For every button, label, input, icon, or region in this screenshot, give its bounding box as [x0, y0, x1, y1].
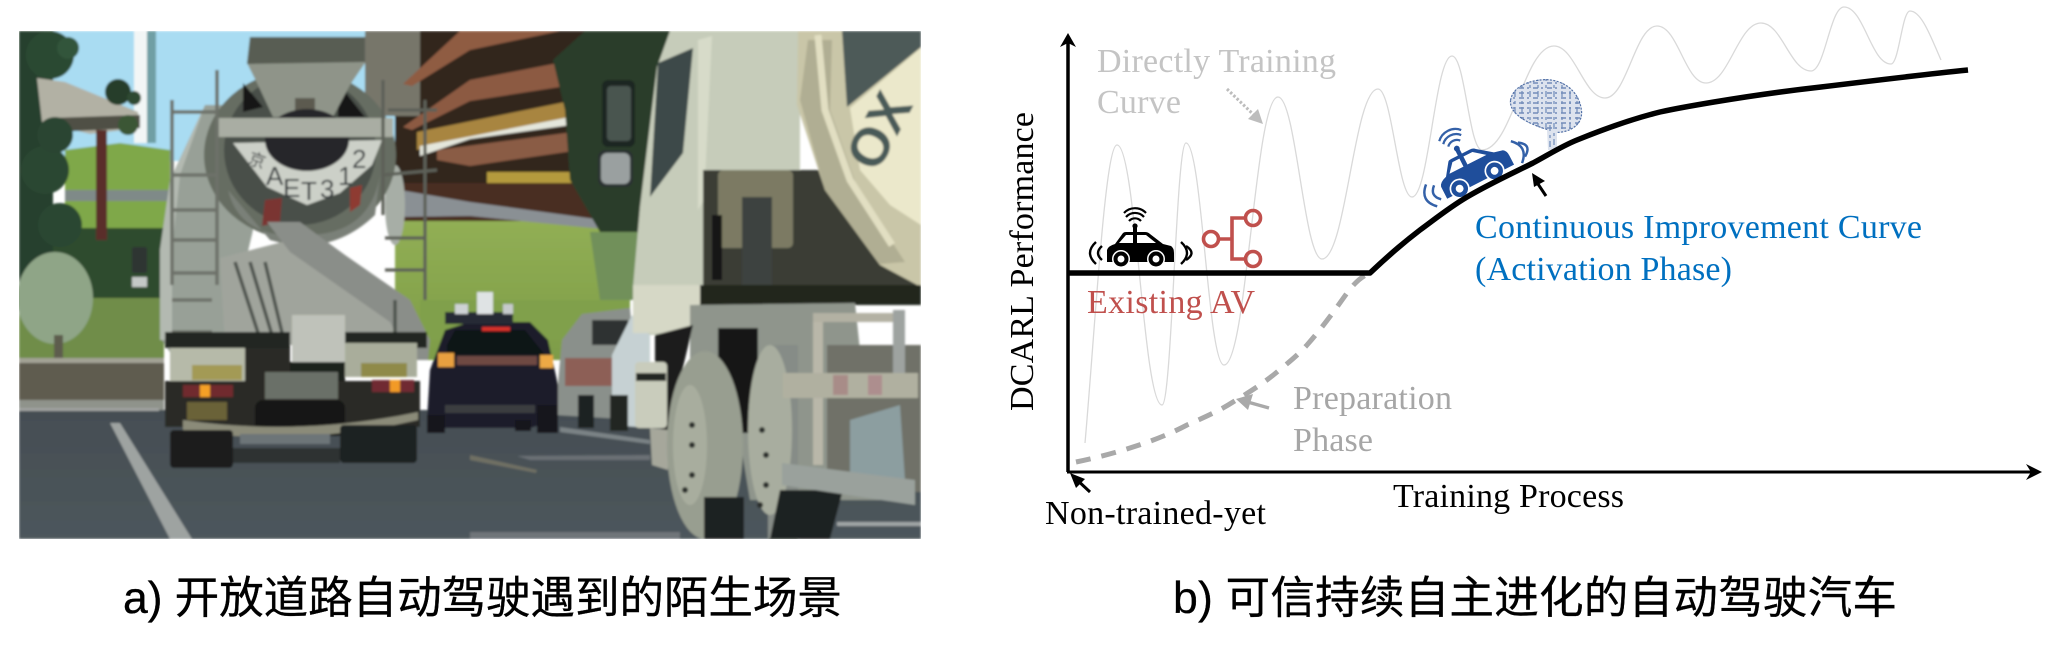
- directly training curve: [1085, 7, 1941, 443]
- chart b: DCARL performance vs training process: [1004, 7, 2042, 532]
- roadside tree and pagoda: [19, 31, 141, 281]
- x axis: [1067, 464, 2042, 480]
- truck plate lettering: 3: [320, 174, 334, 204]
- arrow: to continuous improvement curve: [1532, 173, 1546, 196]
- side mirrors: [598, 80, 635, 187]
- label: directly training curve: [1097, 43, 1336, 121]
- roadside tree behind right truck: [553, 31, 680, 300]
- truck plate lettering: 2: [352, 144, 366, 174]
- icon: red branching tree: [1204, 210, 1260, 266]
- stone wall and curb: [19, 358, 164, 410]
- background grass and hill: [19, 143, 630, 360]
- truck plate lettering: E: [283, 173, 300, 203]
- label: continuous improvement curve: Continuous Improvement Curve: [1475, 209, 1922, 246]
- icon: autonomous car (existing AV): [1090, 208, 1192, 268]
- right concrete mixer truck: [598, 31, 924, 335]
- label: continuous improvement curve: (Activation Phase): [1475, 251, 1732, 288]
- truck plate lettering: 京: [246, 149, 268, 173]
- icon: circuit brain: [1510, 79, 1582, 150]
- label: x axis title: Training Process: [1393, 478, 1624, 515]
- test vehicle: dark SUV with roof sensors: [427, 292, 558, 433]
- preparation phase dashed curve: [1076, 273, 1370, 462]
- arrow: to origin: [1070, 473, 1090, 492]
- right truck chassis, wheels and rack: [633, 285, 921, 540]
- label: y axis title: DCARL Performance: [1004, 112, 1041, 411]
- center concrete mixer truck: [132, 37, 437, 468]
- caption a: a) 开放道路自动驾驶遇到的陌生场景: [123, 574, 842, 623]
- label: directly training curve: Curve: [1097, 84, 1181, 121]
- label: non-trained-yet: Non-trained-yet: [1045, 495, 1267, 532]
- label: preparation phase: Preparation: [1293, 380, 1452, 417]
- olive tree: [19, 250, 95, 359]
- building with rust roofs: [365, 31, 608, 229]
- arrow: to preparation phase: [1236, 394, 1269, 410]
- label: preparation phase: [1293, 380, 1452, 459]
- photo: open road scene with concrete mixer trucks: [17, 31, 924, 540]
- arrow: to directly training curve: [1227, 89, 1263, 124]
- road surface and lane markings: [19, 408, 921, 539]
- label: existing AV: Existing AV: [1087, 284, 1255, 321]
- mixer drum lettering: OX: [835, 83, 924, 180]
- caption b: b) 可信持续自主进化的自动驾驶汽车: [1173, 574, 1897, 623]
- sky and pole: [52, 31, 398, 162]
- truck plate lettering: [247, 148, 366, 201]
- existing AV flat line and continuous improvement curve: [1068, 70, 1968, 273]
- truck plate lettering: A: [266, 161, 284, 191]
- truck plate lettering: 1: [338, 161, 352, 191]
- label: directly training curve: Directly Training: [1097, 43, 1336, 80]
- grey utility truck and white van: [555, 308, 650, 431]
- label: preparation phase: Phase: [1293, 422, 1373, 459]
- icon: blue autonomous car on curve: [1403, 102, 1535, 213]
- label: continuous improvement curve: [1475, 209, 1922, 288]
- y axis: [1060, 33, 1076, 472]
- truck plate lettering: T: [301, 176, 317, 206]
